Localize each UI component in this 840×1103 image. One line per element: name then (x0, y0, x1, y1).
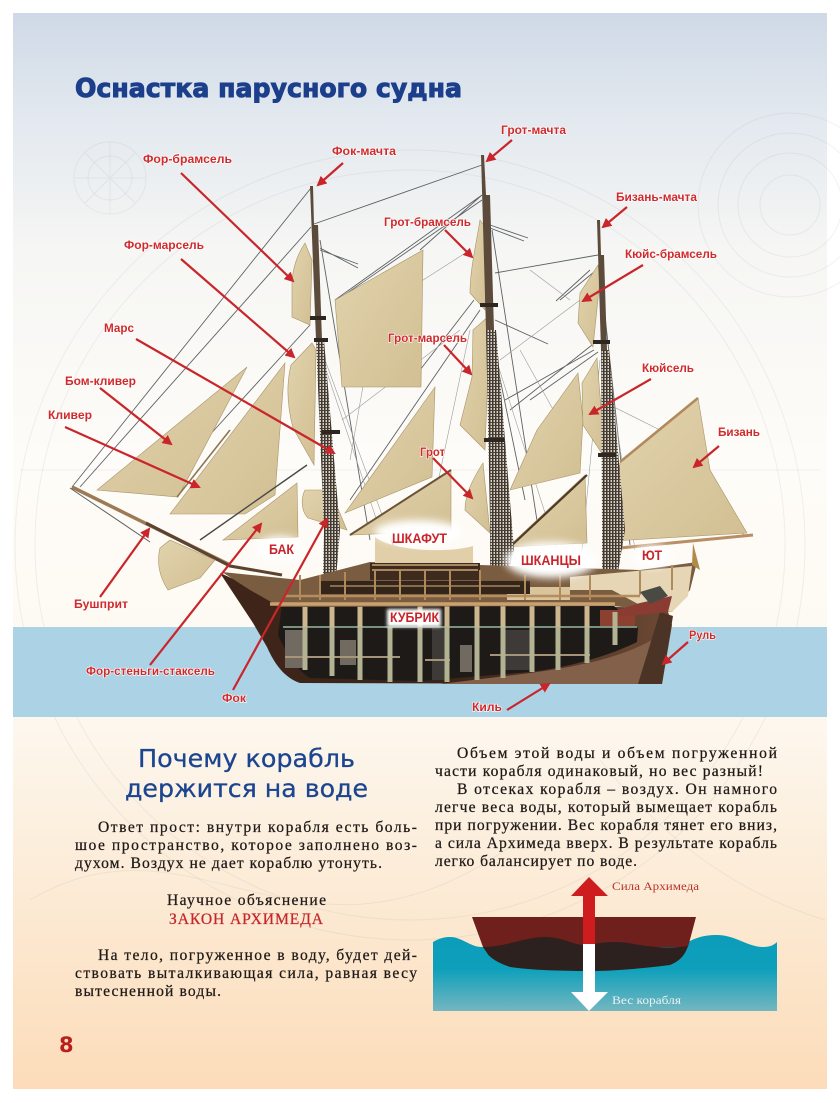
text block: right column: а сила Архимеда вверх. В результате корабль (435, 835, 777, 852)
callout: Kil (472, 684, 549, 714)
callout: Kuisel: Кюйсель (642, 363, 694, 375)
text block: left column: шое пространство, которое заполнено воз- (75, 837, 417, 854)
callout: Fok: Фок (222, 693, 246, 705)
sail: for-bramsel (292, 243, 312, 325)
callout: Bom-kliver: Бом-кливер (65, 376, 136, 388)
sail: bizan (613, 398, 747, 541)
arrow down (571, 944, 608, 1011)
deck label: SHKANTSY: ШКАНЦЫ (521, 553, 581, 568)
cutaway interior (278, 605, 638, 681)
callout: Grot: Грот (420, 447, 445, 459)
label: weight: Вес корабля (612, 995, 682, 1007)
sail: kuis-bramsel (578, 265, 600, 347)
callout: Kuis-bramsel (583, 249, 717, 301)
heading: Почему корабль (138, 744, 355, 773)
callout: For-stengi-staksel (86, 524, 261, 678)
callout: For-stengi-staksel: Фор-стеньги-стаксель (86, 666, 215, 678)
deck label: YUT: ЮТ (642, 548, 663, 563)
callout: Kliver (48, 410, 199, 487)
masts (310, 155, 625, 585)
callout: Kuisel (590, 363, 694, 414)
sail: mid staysails (510, 373, 583, 490)
rudder (638, 612, 673, 684)
text block: right column: Объем этой воды и объем погруженной (457, 745, 777, 762)
callout: Bizan-machta: Бизань-мачта (616, 192, 698, 204)
callout: Fok (222, 519, 327, 705)
callout: For-marsel (124, 240, 294, 357)
sail: upper staysail (335, 250, 423, 387)
sail: main staysails (345, 387, 435, 513)
text block: left column: вытесненной воды. (75, 983, 221, 1000)
boat hull above water (472, 917, 696, 947)
deck label: KUBRIK: КУБРИК (390, 610, 440, 625)
ship illustration (70, 155, 753, 684)
background map pattern (15, 113, 840, 940)
diagram: Archimedes force (433, 877, 777, 1011)
page number: 8 (59, 1033, 74, 1057)
sail: kuisel (582, 358, 605, 458)
callout: Rul: Руль (689, 630, 716, 642)
label: force: Сила Архимеда (612, 881, 699, 893)
sail: for-marsel (288, 343, 316, 465)
text block: right column: легче веса воды, который вымещает корабль (435, 799, 777, 816)
deck label: BAK (256, 536, 304, 562)
callout: Bizan-machta (603, 192, 698, 227)
sail: grot-bramsel (470, 220, 487, 310)
callout: For-marsel: Фор-марсель (124, 240, 204, 252)
sail: kliver (170, 363, 285, 514)
text block: right column (435, 745, 777, 870)
callout: Mars (104, 323, 334, 453)
deck label: YUT (632, 545, 672, 567)
rigging lines (72, 165, 745, 570)
deck label: BAK: БАК (269, 542, 295, 557)
callout: Mars: Марс (104, 323, 135, 335)
callout: For-bramsel: Фор-брамсель (143, 154, 232, 166)
text block: right column: легко балансирует по воде. (435, 853, 637, 870)
heading: держится на воде (125, 774, 368, 803)
text block: right column: при погружении. Вес корабля тянет его вниз, (435, 817, 777, 834)
callout: Bizan: Бизань (718, 427, 760, 439)
text block: left column: Ответ прост: внутри корабля есть боль- (98, 819, 417, 836)
callout: Grot-machta: Грот-мачта (501, 125, 567, 137)
callout: Rul (663, 630, 716, 664)
boat hull below water (483, 937, 688, 971)
text block: left column (75, 819, 417, 1000)
text block: left column: На тело, погруженное в воду, будет дей- (98, 947, 417, 964)
furled sail under bowsprit (159, 540, 215, 590)
spars (70, 398, 753, 575)
callout: Grot-marsel: Грот-марсель (388, 333, 467, 345)
upper hull and decks (222, 537, 700, 617)
callout: Grot-marsel (388, 333, 471, 374)
sail: grot-marsel (460, 315, 490, 450)
sail: grot (465, 463, 490, 533)
callout: Fok-machta (318, 146, 397, 185)
callout: Bom-kliver (65, 376, 171, 444)
callout: Bushprit: Бушприт (74, 599, 128, 611)
title: Оснастка парусного судна (75, 74, 462, 104)
arrow up (571, 877, 608, 944)
callout: Kliver: Кливер (48, 410, 92, 422)
text block: left column: Научное объяснение (167, 892, 326, 909)
heading (125, 744, 368, 803)
callout: Kil: Киль (472, 702, 502, 714)
callout: Grot-bramsel: Грот-брамсель (384, 217, 471, 229)
deck label: SHKAFUT: ШКАФУТ (392, 531, 448, 546)
text block: right column: В отсеках корабля – воздух. Он намного (457, 781, 777, 798)
callout: Grot (420, 447, 472, 498)
callout: Grot-bramsel (384, 217, 472, 257)
interior decks and frames (283, 605, 637, 682)
deck label: SHKAFUT (374, 520, 462, 546)
hull lower (220, 573, 672, 684)
text block: left column: ЗАКОН АРХИМЕДА (169, 911, 324, 928)
callout: Bizan (694, 427, 760, 467)
callout: For-bramsel (143, 154, 293, 281)
sail: fok (302, 490, 347, 530)
callout: Bushprit (74, 529, 149, 611)
water (433, 935, 777, 1011)
sail: bom-kliver (97, 367, 247, 497)
water band (13, 627, 827, 717)
text block: left column: духом. Воздух не дает кораблю утонуть. (75, 855, 382, 872)
sail: for-steng-staysail (223, 483, 298, 540)
callout: Fok-machta: Фок-мачта (332, 146, 397, 158)
deck label: SHKANTSY (505, 542, 597, 578)
text block: right column: части корабля одинаковый, но вес разный! (435, 763, 763, 780)
hull lower right plank (440, 640, 652, 684)
text block: left column: ствовать выталкивающая сила, равная весу (75, 965, 417, 982)
callout: Kuis-bramsel: Кюйс-брамсель (625, 249, 717, 261)
callout: Grot-machta (487, 125, 567, 161)
